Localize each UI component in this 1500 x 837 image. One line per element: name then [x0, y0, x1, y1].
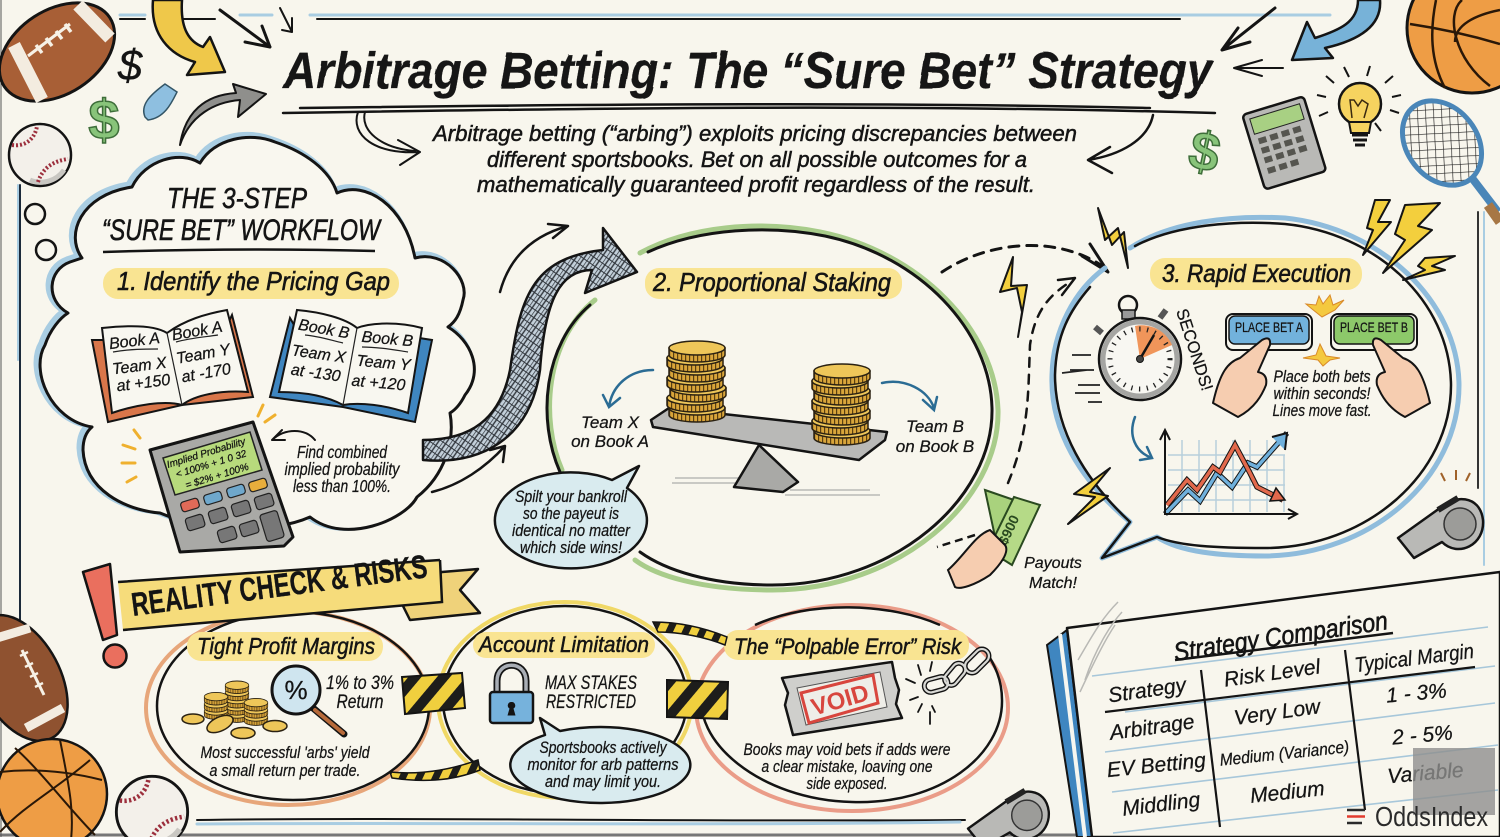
body text: Books may void bets if adds were	[744, 741, 950, 759]
label: team B: Team B	[906, 417, 964, 436]
icon: whistle bottom	[968, 791, 1049, 837]
icon: Book A: Book A	[108, 330, 161, 353]
icon: left hand tapping	[1213, 338, 1270, 417]
icon: Book B: Book B	[297, 317, 351, 342]
label: team B: on Book B	[896, 437, 974, 456]
icon: Book A: Team X	[111, 355, 169, 378]
icon: calculator top right	[1242, 96, 1326, 190]
arrow: big hatched step 1 to 2	[423, 228, 637, 461]
icon: place bet B button	[1331, 314, 1417, 350]
icon: Book B: at +120	[351, 373, 406, 394]
icon: coin piles	[182, 681, 287, 738]
table column: typical margin	[1353, 640, 1475, 788]
icon: tennis racket	[1386, 85, 1500, 222]
arrow: note pointer	[272, 430, 315, 440]
icon: padlock	[490, 665, 533, 723]
icon: void ticket	[782, 662, 902, 735]
intro text: mathematically guaranteed profit regardless of the result.	[477, 172, 1035, 197]
label: team B	[896, 417, 974, 456]
arrow: dashed payout to circle	[937, 535, 975, 547]
note: find combined probability: less than 100%.	[293, 476, 391, 496]
intro text: Arbitrage betting (“arbing”) exploits pricing discrepancies between	[431, 121, 1077, 146]
outline	[696, 605, 1008, 811]
icon: Book A: at +150	[116, 372, 171, 395]
step 3 label: 3. Rapid Execution	[1162, 260, 1351, 288]
icon: magnifier with percent: %	[284, 675, 308, 705]
icon: lightning bolt lower left of bubble	[1068, 468, 1110, 524]
callout: split your bankroll: identical no matter	[512, 522, 631, 540]
stat: 1 to 3 percent: Return	[336, 692, 384, 713]
body text: Most successful 'arbs' yield	[200, 744, 370, 762]
icon: implied probability calculator	[122, 405, 293, 552]
body text: a small return per trade.	[210, 762, 360, 780]
table column: strategy: Strategy	[1107, 674, 1189, 707]
label: payouts match: Match!	[1029, 575, 1078, 592]
icon: broken chain	[906, 646, 992, 724]
arrow: to team X	[603, 370, 653, 407]
notebook title: Strategy Comparison	[1172, 605, 1390, 667]
label: team X: Team X	[581, 413, 640, 432]
hazard tape: right box	[667, 680, 728, 719]
icon: Book B: Team Y	[356, 353, 412, 374]
icon: thought bubbles	[25, 204, 56, 260]
icon: seesaw balance	[651, 408, 887, 495]
table column: risk level: Medium (Variance)	[1219, 737, 1350, 770]
icon: football top left	[0, 0, 133, 122]
panel: risk circle, palpable error	[696, 605, 1008, 811]
stat: 1 to 3 percent: 1% to 3%	[326, 673, 394, 694]
intro text	[431, 121, 1077, 197]
table column: risk level: Very Low	[1233, 695, 1323, 730]
icon: Book B: Team X	[290, 342, 348, 367]
arrow: blue curved top right	[1292, 0, 1380, 60]
icon: Book B	[270, 310, 432, 422]
step 1 label: 1. Identify the Pricing Gap	[117, 266, 390, 296]
table column: strategy: EV Betting	[1106, 749, 1207, 782]
table column: typical margin: 2 - 5%	[1390, 721, 1454, 750]
panel: step 3 speech bubble	[1052, 217, 1459, 558]
notebook page	[1047, 572, 1500, 837]
arrow: thin black pointing at title	[1234, 60, 1283, 76]
icon: Book A: Book A	[171, 319, 224, 344]
outline	[146, 611, 430, 805]
hazard tape: upper right	[653, 622, 727, 645]
icon: right coin stack	[812, 364, 870, 445]
table lines	[1105, 650, 1475, 827]
icon: place bet B button: PLACE BET B	[1340, 319, 1408, 335]
table column: typical margin: Variable	[1386, 759, 1464, 788]
icon: small blue whistle	[144, 84, 177, 120]
arrow: small curved upper	[500, 224, 568, 292]
icon: hand holding cash: $900	[995, 512, 1022, 547]
panel: risk circle, account limitation	[438, 602, 692, 803]
heading label: Tight Profit Margins	[197, 633, 375, 659]
bubble outline	[1052, 217, 1459, 558]
note: place both bets: Place both bets	[1274, 368, 1370, 386]
table column: strategy: Arbitrage	[1106, 710, 1196, 745]
icon: place bet A button	[1226, 314, 1312, 350]
icon: Book A: Team Y	[175, 341, 233, 368]
workflow heading	[102, 183, 382, 252]
note: place both bets	[1272, 368, 1372, 420]
stat: 1 to 3 percent	[326, 673, 394, 713]
workflow heading: THE 3-STEP	[167, 183, 308, 215]
callout: sportsbooks monitor: Sportsbooks actively	[540, 739, 668, 757]
banner: reality check and risks	[118, 547, 480, 630]
intro text: different sportsbooks. Bet on all possible outcomes for a	[487, 147, 1027, 172]
body text: a clear mistake, loaving one	[762, 758, 932, 776]
note: place both bets: within seconds!	[1274, 385, 1371, 403]
label: team X: on Book A	[571, 432, 649, 451]
line chart	[1160, 430, 1297, 519]
icon: Book A	[92, 310, 253, 422]
icon: hand holding cash	[948, 490, 1040, 588]
icon: black dollar sign: $	[117, 41, 144, 90]
title: Arbitrage Betting: The “Sure Bet” Strategy	[281, 42, 1214, 99]
panel: risk circle, tight profit margins	[146, 611, 430, 805]
arrow: dashed step 2 to 3	[942, 244, 1108, 272]
note: find combined probability	[284, 442, 401, 496]
callout: sportsbooks monitor	[510, 718, 690, 803]
arrow: curved blue to chart	[1132, 417, 1152, 460]
icon: basketball bottom left	[0, 739, 107, 837]
heading label: The “Polpable Error” Risk	[734, 634, 962, 659]
icon: baseball left	[9, 124, 71, 186]
banner: reality check and risks: REALITY CHECK & RISKS	[129, 547, 429, 623]
arrow: dashed payout to 3	[1008, 278, 1075, 483]
step 2 label: 2. Proportional Staking	[652, 267, 891, 297]
icon: burst sparks	[1303, 295, 1344, 366]
cloud outline	[37, 135, 474, 529]
label: max stakes restricted: MAX STAKES	[545, 673, 637, 694]
arrow: left curved to intro	[357, 112, 420, 165]
icon: implied probability calculator: Implied Probability	[166, 436, 248, 471]
table column: typical margin: 1 - 3%	[1385, 679, 1448, 708]
icon: void ticket: VOID	[808, 679, 872, 722]
icon: basketball top right	[1407, 0, 1500, 93]
arrow: thin black top	[280, 8, 292, 32]
icon: green dollar sign: $	[88, 88, 120, 151]
outline	[438, 602, 692, 798]
note: find combined probability: Find combined	[297, 442, 388, 462]
arrow: black top left	[220, 10, 270, 47]
icon: left coin stack	[667, 341, 726, 422]
table column: risk level: Risk Level	[1223, 655, 1323, 692]
body text: side exposed.	[806, 775, 888, 793]
icon: stopwatch	[1062, 296, 1181, 402]
arrow: to team B	[882, 382, 937, 410]
panel: step 2 proportional staking circle	[495, 226, 998, 590]
table column: risk level	[1219, 655, 1350, 808]
arrow: small curved lower	[432, 446, 505, 492]
icon: right hand tapping	[1373, 338, 1430, 417]
icon: baseball bottom	[116, 776, 188, 837]
body text	[200, 744, 370, 780]
arrow: yellow curved	[153, 0, 225, 75]
table column: typical margin: Typical Margin	[1353, 640, 1475, 677]
circle outline	[547, 226, 998, 590]
callout: split your bankroll: Spilt your bankroll	[515, 488, 628, 506]
icon: magnifier with percent	[272, 666, 344, 734]
table column: risk level: Medium	[1249, 777, 1326, 808]
icon: place bet A button: PLACE BET A	[1235, 319, 1304, 335]
table column: strategy	[1106, 674, 1207, 821]
panel: step 1 thought cloud	[37, 135, 474, 552]
icon: green dollar right: $	[1184, 119, 1226, 184]
label: seconds: SECONDS!	[1172, 306, 1217, 393]
icon: lightning bolt near payout	[1000, 257, 1027, 337]
icon: Book B: at -130	[290, 362, 342, 385]
icon: football bottom left	[0, 599, 87, 757]
watermark patch	[1413, 748, 1495, 815]
heading label: Account Limitation	[477, 632, 649, 657]
label: max stakes restricted: RESTRICTED	[546, 692, 636, 713]
icon: Book A: at -170	[180, 361, 232, 386]
label: team X	[571, 413, 649, 451]
hazard tape: between orange and yellow box	[402, 673, 465, 714]
table column: strategy: Middling	[1121, 788, 1202, 821]
arrow: grey hatched	[180, 84, 266, 145]
icon: lightning bolts top right	[1363, 200, 1455, 280]
callout: sportsbooks monitor: and may limit you.	[545, 773, 661, 791]
callout: split your bankroll: so the payeut is	[523, 505, 619, 523]
label: payouts match: Payouts	[1024, 555, 1082, 572]
callout: sportsbooks monitor: monitor for arb patterns	[528, 756, 678, 774]
icon: lightning bolt top of bubble	[1098, 208, 1128, 268]
icon: whistle right	[1398, 470, 1483, 558]
body text	[744, 741, 950, 793]
icon: light bulb	[1317, 66, 1401, 145]
callout: split your bankroll	[495, 466, 647, 568]
label: max stakes restricted	[545, 673, 637, 713]
note: place both bets: Lines move fast.	[1272, 402, 1372, 420]
callout: split your bankroll: which side wins!	[520, 539, 622, 557]
icon: exclamation mark	[83, 564, 126, 668]
workflow heading: “SURE BET” WORKFLOW	[102, 214, 382, 247]
label: payouts match	[1024, 555, 1082, 592]
title underline	[283, 104, 1215, 113]
icon: Book B: Book B	[361, 329, 414, 350]
hazard tape: lower left	[390, 760, 480, 780]
arrow: top right black	[1222, 8, 1275, 50]
panel: strategy comparison notebook	[1047, 572, 1500, 837]
note: find combined probability: implied probability	[284, 459, 401, 479]
icon: implied probability calculator: < 100% + 1 0 32	[175, 448, 248, 481]
icon: implied probability calculator: = $2% + 100%	[184, 462, 250, 491]
arrow: right curved to intro	[1088, 115, 1153, 173]
